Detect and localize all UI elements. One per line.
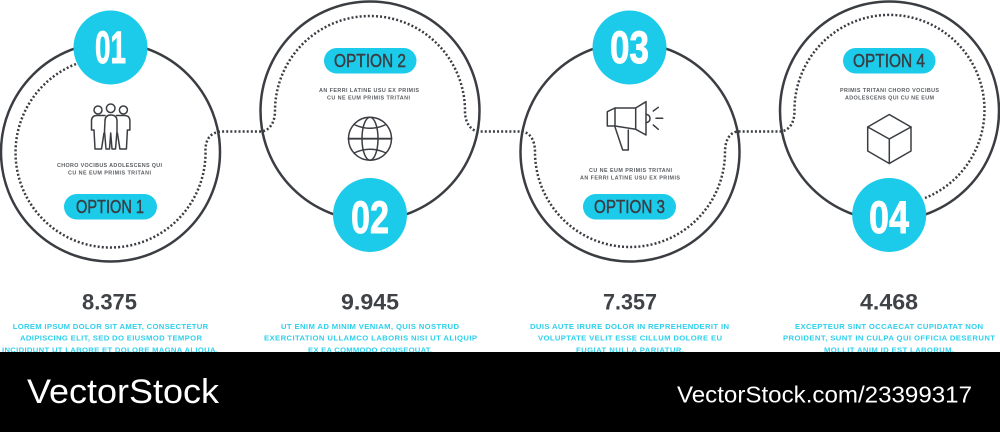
stat block 2: EXERCITATION ULLAMCO LABORIS NISI UT ALIQUIP [264, 334, 477, 343]
icon: globe [348, 117, 392, 160]
icon: megaphone [607, 102, 663, 150]
footer watermark band [0, 352, 1000, 432]
stat block 3: DUIS AUTE IRURE DOLOR IN REPREHENDERIT IN [530, 322, 729, 331]
stat block 2: EX EA COMMODO CONSEQUAT. [308, 345, 432, 354]
description text: CU NE EUM PRIMIS TRITANI [589, 168, 672, 174]
description text: CHORO VOCIBUS ADOLESCENS QUI [57, 163, 162, 169]
panel: option 1 [1, 10, 220, 262]
icon: cube [868, 114, 911, 164]
stat block 3: VOLUPTATE VELIT ESSE CILLUM DOLORE EU [538, 334, 722, 343]
pill: option 3 [583, 194, 676, 220]
description text [319, 88, 419, 102]
stat block 1: 8.375 [82, 290, 137, 314]
number 04: 04 [869, 192, 909, 243]
description text: ADOLESCENS QUI CU NE EUM [845, 96, 934, 102]
pill: option 2 [324, 48, 416, 74]
description text: AN FERRI LATINE USU EX PRIMIS [319, 88, 419, 94]
description text: AN FERRI LATINE USU EX PRIMIS [580, 175, 680, 181]
stat block 3 [530, 290, 729, 354]
stat block 4: MOLLIT ANIM ID EST LABORUM. [824, 345, 954, 354]
description text [57, 163, 162, 176]
pill: option 2: OPTION 2 [334, 51, 406, 71]
stat block 2 [264, 290, 477, 354]
panel: option 3 [520, 10, 740, 262]
pill: option 4: OPTION 4 [853, 51, 925, 71]
number 01: 01 [95, 22, 126, 73]
icon: people [92, 104, 130, 149]
stat block 2: 9.945 [341, 290, 399, 314]
description text [840, 88, 939, 102]
description text: PRIMIS TRITANI CHORO VOCIBUS [840, 88, 939, 94]
stat block 4: EXCEPTEUR SINT OCCAECAT CUPIDATAT NON [795, 322, 983, 331]
stat block 3: 7.357 [603, 290, 657, 314]
stat block 4: PROIDENT, SUNT IN CULPA QUI OFFICIA DESERUNT [783, 334, 995, 343]
panel: option 4 [780, 2, 999, 252]
pill: option 4 [843, 48, 936, 74]
pill: option 1: OPTION 1 [76, 197, 144, 217]
dotted connector line [16, 15, 984, 248]
description text: CU NE EUM PRIMIS TRITANI [68, 170, 152, 176]
pill: option 3: OPTION 3 [594, 197, 665, 217]
stat block 4: 4.468 [860, 290, 918, 314]
stat block 1 [2, 290, 218, 354]
stat block 1: LOREM IPSUM DOLOR SIT AMET, CONSECTETUR [13, 322, 209, 331]
description text: CU NE EUM PRIMIS TRITANI [327, 96, 410, 102]
number 03: 03 [610, 22, 649, 73]
panel: option 2 [260, 2, 480, 252]
number 02: 02 [351, 192, 389, 243]
stat block 4 [783, 290, 995, 354]
image id text: VectorStock.com/23399317 [677, 382, 972, 408]
stat block 1: INCIDIDUNT UT LABORE ET DOLORE MAGNA ALIQUA. [2, 345, 218, 354]
pill: option 1 [64, 194, 157, 220]
description text [580, 168, 680, 181]
stat block 3: FUGIAT NULLA PARIATUR. [576, 345, 684, 354]
logo text: VectorStock [27, 373, 220, 411]
stat block 1: ADIPISCING ELIT, SED DO EIUSMOD TEMPOR [20, 334, 202, 343]
stat block 2: UT ENIM AD MINIM VENIAM, QUIS NOSTRUD [281, 322, 459, 331]
